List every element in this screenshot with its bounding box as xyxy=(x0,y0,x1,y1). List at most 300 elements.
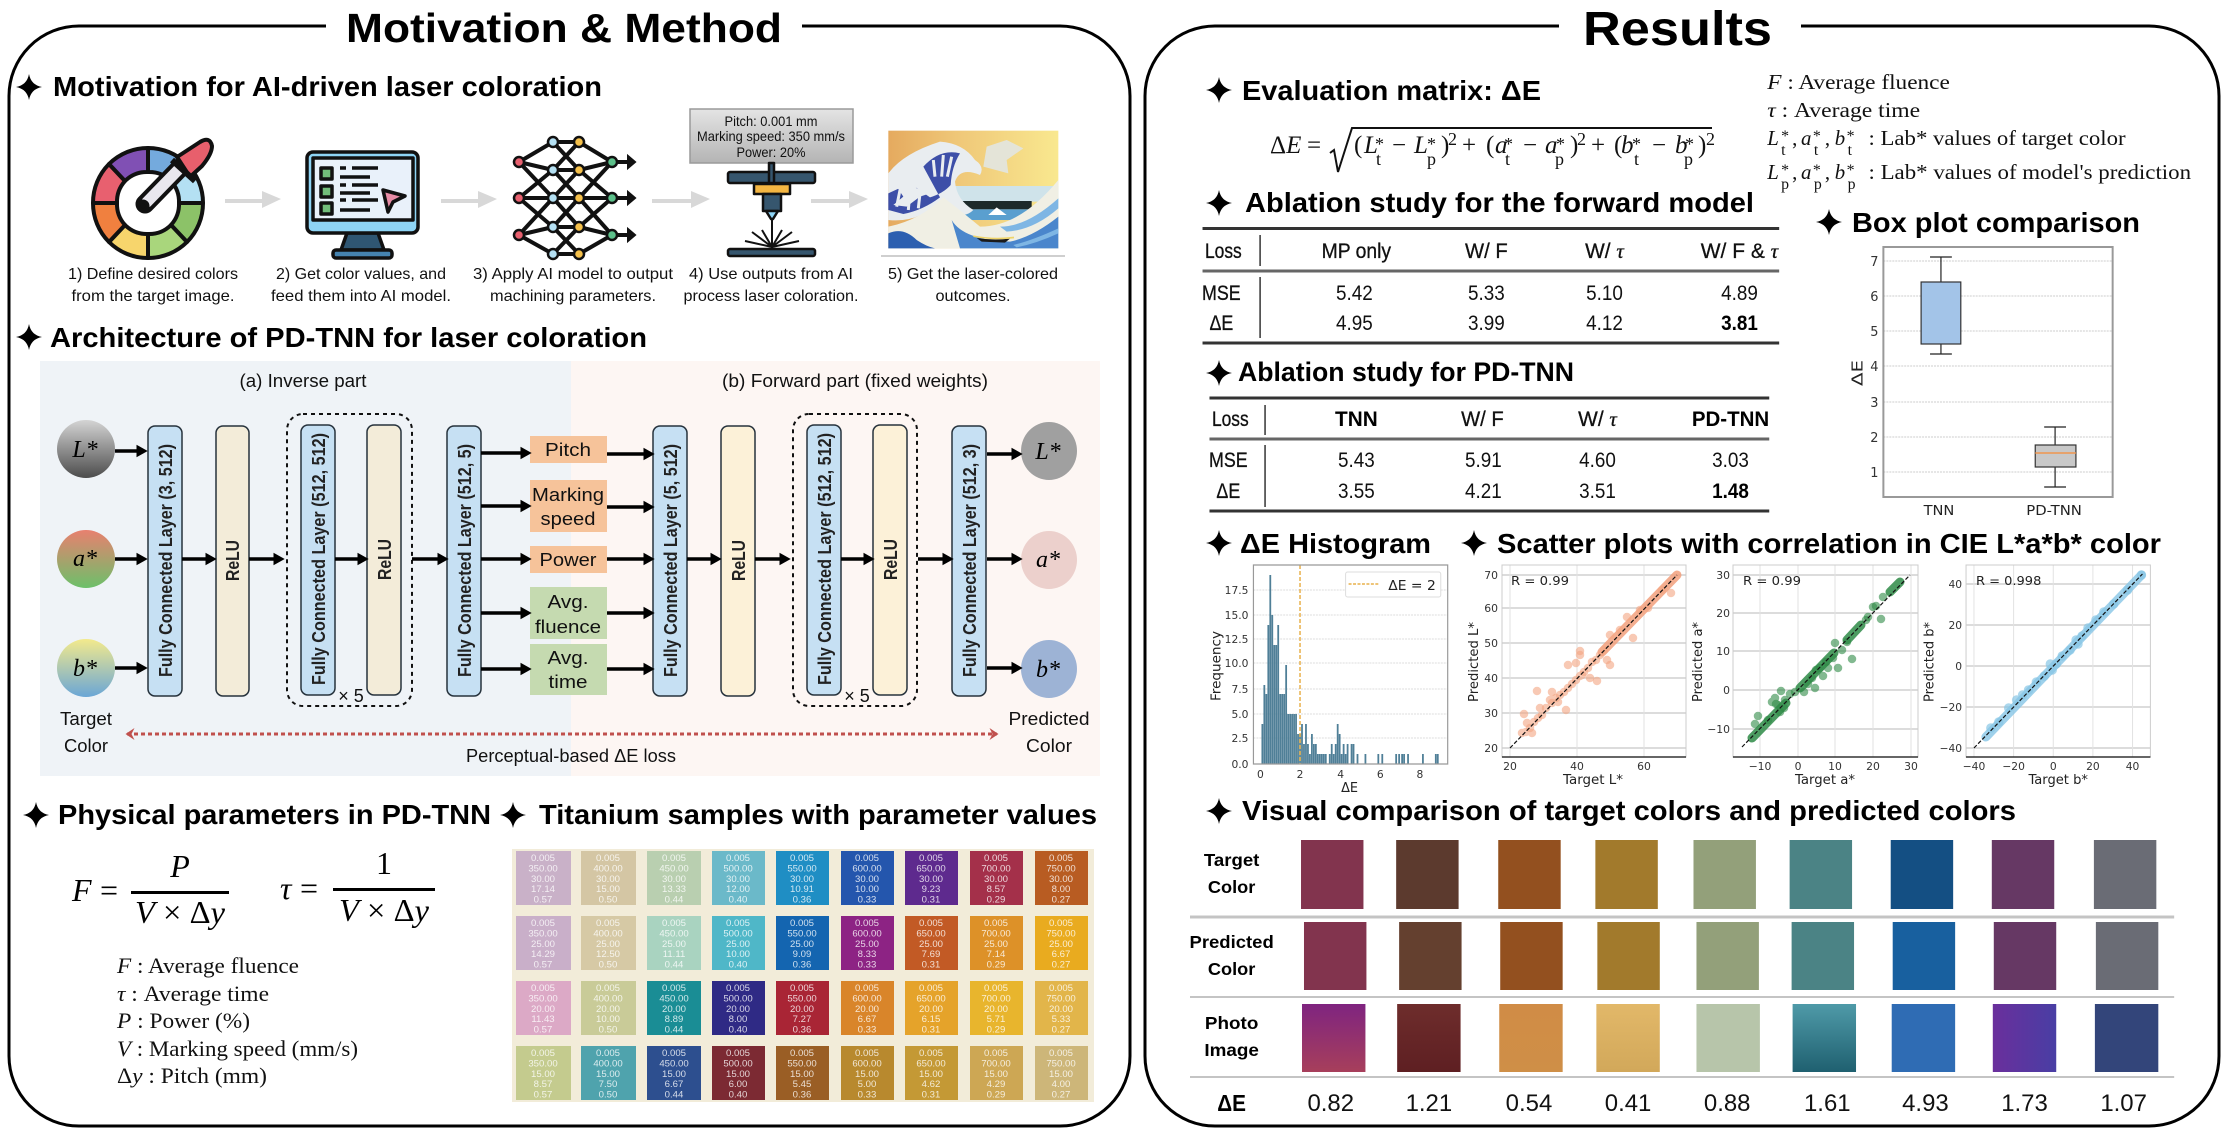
chart: delta E histogram xyxy=(1210,565,1448,796)
image: titanium sample grid: 7.50 xyxy=(599,1079,617,1090)
image: titanium sample grid: 7.27 xyxy=(793,1014,811,1025)
layer: fully connected 512,5: Fully Connected Layer (512, 5) xyxy=(455,444,475,677)
repeated block x5, forward xyxy=(793,414,917,706)
image: titanium sample grid: 9.09 xyxy=(793,949,811,960)
image: titanium sample grid: 0.29 xyxy=(987,1090,1005,1101)
image: titanium sample grid: 0.36 xyxy=(793,960,811,971)
chart: scatter a: 30 xyxy=(1904,760,1918,773)
image: titanium sample grid: 15.00 xyxy=(726,1069,750,1080)
chart: scatter a: −10 xyxy=(1707,723,1730,736)
image: titanium sample grid: 0.27 xyxy=(1052,895,1070,906)
image: titanium sample grid: 0.57 xyxy=(534,960,552,971)
icon: neural network xyxy=(514,137,635,259)
image: titanium sample grid: 0.005 xyxy=(855,983,879,994)
formula: delta E: p xyxy=(1427,149,1436,169)
image: titanium sample grid: 500.00 xyxy=(723,863,753,874)
image: titanium sample grid: 0.005 xyxy=(919,983,943,994)
image: titanium sample grid: 0.005 xyxy=(662,983,686,994)
image: titanium sample grid: 6.67 xyxy=(665,1079,683,1090)
image: titanium sample grid: 30.00 xyxy=(919,874,943,885)
image: titanium sample grid: 0.005 xyxy=(662,1048,686,1059)
formula: delta E: * xyxy=(1632,134,1641,154)
image: titanium sample grid: 600.00 xyxy=(852,863,882,874)
image: titanium sample grid: 750.00 xyxy=(1046,993,1076,1004)
image: titanium sample grid: 25.00 xyxy=(790,939,814,950)
chart: scatter a: 30 xyxy=(1716,569,1730,582)
formula: average time: τ xyxy=(280,870,293,906)
chart: delta E histogram: 6 xyxy=(1377,768,1384,781)
table: PD-TNN ablation: 5.43 xyxy=(1338,449,1375,472)
image: titanium sample grid: 0.33 xyxy=(858,1090,876,1101)
table: forward model ablation: Loss xyxy=(1205,240,1242,263)
image: titanium sample grid: 350.00 xyxy=(528,1058,558,1069)
heading: motivation for AI-driven laser coloration: Motivation for AI-driven laser coloration xyxy=(53,71,602,102)
image: titanium sample grid: 30.00 xyxy=(662,874,686,885)
chart: scatter L: R = 0.99 xyxy=(1511,573,1569,588)
legend: delta E symbols: L xyxy=(1766,160,1779,184)
chart: scatter a: 20 xyxy=(1866,760,1880,773)
formula: average time: V × Δy xyxy=(339,892,430,928)
formula: delta E: ( xyxy=(1354,132,1362,159)
chart: scatter a: 20 xyxy=(1716,607,1730,620)
image: titanium sample grid: 0.50 xyxy=(599,1025,617,1036)
image: titanium sample grid: 0.005 xyxy=(790,853,814,864)
image: titanium sample grid: 0.005 xyxy=(726,1048,750,1059)
chart: delta E histogram: 4 xyxy=(1337,768,1344,781)
image: titanium sample grid: 750.00 xyxy=(1046,928,1076,939)
image: titanium sample grid: 0.005 xyxy=(531,853,555,864)
caption: step 4: 4) Use outputs from AI xyxy=(689,266,853,283)
image: titanium sample grid: 0.36 xyxy=(793,895,811,906)
legend: delta E symbols: p xyxy=(1848,176,1856,193)
legend: physical parameter symbols: P : Power (%) xyxy=(116,1008,250,1033)
chart: scatter a: 0 xyxy=(1795,760,1802,773)
table: PD-TNN ablation: 3.55 xyxy=(1338,480,1375,503)
table: PD-TNN ablation: PD-TNN xyxy=(1692,408,1769,431)
row: delta E values: ΔE xyxy=(1217,1090,1246,1116)
heading: box plot comparison: Box plot comparison xyxy=(1852,207,2140,238)
image: titanium sample grid: 450.00 xyxy=(659,1058,689,1069)
formula: average fluence: = xyxy=(100,872,118,908)
table: PD-TNN ablation: W/ τ xyxy=(1578,407,1618,431)
heading: ablation study forward model: Ablation study for the forward model xyxy=(1245,187,1754,218)
table: forward model ablation: MSE xyxy=(1202,282,1241,305)
formula: delta E: 2 xyxy=(1577,129,1586,149)
image: titanium sample grid: 0.36 xyxy=(793,1090,811,1101)
row: delta E values: 0.41 xyxy=(1605,1090,1651,1117)
image: titanium sample grid: 0.44 xyxy=(665,960,684,971)
parameter: pitch xyxy=(530,436,607,463)
image: titanium sample grid: 15.00 xyxy=(596,1069,620,1080)
image: titanium sample grid: 0.40 xyxy=(729,960,747,971)
image: titanium sample grid: 400.00 xyxy=(593,863,623,874)
formula: average time: = xyxy=(300,870,318,906)
image: titanium sample grid: 15.00 xyxy=(984,1069,1008,1080)
image: titanium sample grid: 650.00 xyxy=(916,928,946,939)
image: titanium sample grid: 25.00 xyxy=(726,939,750,950)
heading: ablation study PD-TNN: Ablation study for PD-TNN xyxy=(1238,357,1574,387)
chart: scatter L: 20 xyxy=(1484,742,1498,755)
image: titanium sample grid: 700.00 xyxy=(981,993,1011,1004)
title: results: Results xyxy=(1583,3,1772,56)
image: titanium sample grid: 600.00 xyxy=(852,928,882,939)
image: titanium sample grid: 8.00 xyxy=(729,1014,747,1025)
row: predicted color: Color xyxy=(1208,959,1255,979)
image: titanium sample grid: 20.00 xyxy=(790,1004,814,1015)
chart: scatter b: 0 xyxy=(1955,660,1962,673)
chart: box plot: 3 xyxy=(1870,396,1878,411)
image: titanium sample grid: 0.31 xyxy=(922,895,940,906)
image: titanium sample grid: 15.00 xyxy=(919,1069,943,1080)
row: delta E values xyxy=(1217,1090,2147,1117)
legend: delta E symbols: a xyxy=(1801,126,1811,150)
image: titanium sample grid: 0.005 xyxy=(790,983,814,994)
image: titanium sample grid: 30.00 xyxy=(1049,874,1073,885)
row: target color: Color xyxy=(1208,877,1255,897)
parameter: average fluence: fluence xyxy=(535,617,601,637)
heading: evaluation matrix: Evaluation matrix: ΔE xyxy=(1242,75,1541,106)
chart: scatter L: 50 xyxy=(1484,637,1498,650)
table: PD-TNN ablation: MSE xyxy=(1209,449,1248,472)
table: forward model ablation: 5.33 xyxy=(1468,282,1505,305)
callout: machining parameter output: Marking speed: 350 mm/s xyxy=(697,128,845,144)
repeated block x5, forward: × 5 xyxy=(844,686,870,706)
formula: delta E: L xyxy=(1413,132,1428,159)
legend: delta E symbols: * xyxy=(1813,162,1821,179)
caption: step 5 xyxy=(888,266,1058,305)
parameter: average time: Avg. xyxy=(548,648,588,668)
image: titanium sample grid: 20.00 xyxy=(596,1004,620,1015)
chart: scatter L: 60 xyxy=(1484,602,1498,615)
image: titanium sample grid: 15.00 xyxy=(855,1069,879,1080)
chart: scatter L: 20 xyxy=(1503,760,1517,773)
image: titanium sample grid: 650.00 xyxy=(916,993,946,1004)
formula: average time xyxy=(280,845,435,928)
image: titanium sample grid: 0.005 xyxy=(726,918,750,929)
image: titanium sample grid: 7.14 xyxy=(987,949,1006,960)
image: titanium sample grid: 20.00 xyxy=(855,1004,879,1015)
image: titanium sample grid: 5.33 xyxy=(1052,1014,1070,1025)
image: titanium sample grid: 6.67 xyxy=(858,1014,876,1025)
image: titanium sample grid: 30.00 xyxy=(726,874,750,885)
chart: box plot: TNN xyxy=(1922,504,1954,519)
layer: fully connected 5,512: Fully Connected Layer (5, 512) xyxy=(661,444,681,677)
legend: physical parameter symbols: F : Average fluence xyxy=(116,953,299,978)
formula: delta E: * xyxy=(1504,134,1513,154)
formula: average fluence: F xyxy=(71,872,92,908)
parameter: marking speed: Marking xyxy=(532,485,604,505)
heading: scatter plots: Scatter plots with correlation in CIE L*a*b* color xyxy=(1497,528,2161,559)
image: titanium sample grid: 25.00 xyxy=(531,939,555,950)
image: titanium sample grid: 600.00 xyxy=(852,993,882,1004)
image: titanium sample grid: 750.00 xyxy=(1046,863,1076,874)
icon: laser head xyxy=(728,163,815,256)
row: target color: Target xyxy=(1204,850,1259,870)
chart: delta E histogram: 17.5 xyxy=(1225,584,1248,597)
image: titanium sample grid: 4.62 xyxy=(922,1079,940,1090)
chart: box plot: 2 xyxy=(1870,431,1878,446)
formula: delta E: b xyxy=(1675,132,1688,159)
formula: average time: 1 xyxy=(376,845,392,881)
image: titanium sample grid: 700.00 xyxy=(981,863,1011,874)
arrow: step 3 to 4 xyxy=(652,191,710,208)
table: PD-TNN ablation: 1.48 xyxy=(1712,480,1749,503)
row: delta E values: 1.21 xyxy=(1406,1090,1452,1117)
image: titanium sample grid: 0.005 xyxy=(919,918,943,929)
chart: delta E histogram: Frequency xyxy=(1210,631,1225,701)
chart: box plot: ΔE xyxy=(1849,360,1867,386)
image: titanium sample grid: 6.15 xyxy=(922,1014,940,1025)
caption: step 3: machining parameters. xyxy=(490,288,656,305)
chart: scatter b: −40 xyxy=(1939,742,1962,755)
formula: average fluence: V × Δy xyxy=(135,894,226,930)
table: PD-TNN ablation: W/ F xyxy=(1461,408,1504,431)
panel: forward part xyxy=(571,361,1100,776)
formula: delta E: ( xyxy=(1486,132,1494,159)
row: delta E values: 4.93 xyxy=(1902,1090,1949,1117)
chart: scatter L: 40 xyxy=(1570,760,1584,773)
chart: box plot: 5 xyxy=(1870,325,1878,340)
arrows: network data flow xyxy=(115,451,1015,669)
image: titanium sample grid: 350.00 xyxy=(528,928,558,939)
image: titanium sample grid: 12.00 xyxy=(726,884,750,895)
parameter: marking speed: speed xyxy=(540,509,596,529)
image: titanium sample grid: 20.00 xyxy=(531,1004,555,1015)
image: titanium sample grid: 0.005 xyxy=(662,918,686,929)
formula: delta E: − xyxy=(1392,132,1406,159)
image: titanium sample grid: 0.29 xyxy=(987,960,1005,971)
row: photo image: Photo xyxy=(1205,1013,1258,1033)
image: titanium sample grid: 0.57 xyxy=(534,1025,552,1036)
heading: visual comparison: Visual comparison of target colors and predicted colors xyxy=(1242,795,2016,826)
formula: delta E: ) xyxy=(1570,132,1578,159)
table: forward model ablation: W/ F xyxy=(1465,240,1508,263)
target color inputs: a* xyxy=(73,546,97,572)
image: titanium sample grid: 350.00 xyxy=(528,863,558,874)
image: titanium sample grid: 0.40 xyxy=(729,1025,747,1036)
image: titanium sample grid: 0.57 xyxy=(534,1090,552,1101)
image: titanium sample grid: 450.00 xyxy=(659,993,689,1004)
icon: computer monitor xyxy=(307,152,418,258)
legend: delta E symbols: F : Average fluence xyxy=(1766,70,1950,94)
image: titanium sample grid: 10.00 xyxy=(596,1014,620,1025)
image: titanium sample grid: 0.50 xyxy=(599,895,617,906)
image: titanium sample grid: 0.005 xyxy=(855,1048,879,1059)
image: titanium sample grid: 14.29 xyxy=(531,949,555,960)
layer: ReLU 3 xyxy=(721,426,755,696)
parameter: pitch: Pitch xyxy=(545,440,591,460)
caption: step 1 xyxy=(68,266,238,305)
label: target color: Target xyxy=(60,709,112,729)
image: titanium sample grid: 0.005 xyxy=(662,853,686,864)
repeated block x5, inverse: ReLU xyxy=(375,539,395,580)
formula: delta E: a xyxy=(1495,132,1508,159)
formula: delta E: t xyxy=(1505,149,1510,169)
row: predicted color xyxy=(1190,922,2158,990)
image: titanium sample grid: 5.71 xyxy=(987,1014,1005,1025)
chart: scatter a: 10 xyxy=(1716,645,1730,658)
formula: delta E: ) xyxy=(1698,132,1706,159)
chart: delta E histogram: 15.0 xyxy=(1225,609,1249,622)
panel: forward part: (b) Forward part (fixed weights) xyxy=(722,371,988,391)
chart: delta E histogram: 2.5 xyxy=(1231,732,1248,745)
formula: delta E: ( xyxy=(1614,132,1622,159)
legend: physical parameter symbols: Δy : Pitch (mm) xyxy=(117,1063,267,1088)
image: titanium sample grid: 0.005 xyxy=(531,983,555,994)
heading: architecture of PD-TNN: Architecture of PD-TNN for laser coloration xyxy=(50,322,647,353)
image: titanium sample grid: 0.31 xyxy=(922,1090,940,1101)
image: laser-colored great wave xyxy=(881,123,1065,257)
predicted color outputs: a* xyxy=(1036,547,1060,573)
image: titanium sample grid: 400.00 xyxy=(593,993,623,1004)
chart: delta E histogram: ΔE = 2 xyxy=(1388,579,1436,594)
image: titanium sample grid: 20.00 xyxy=(726,1004,750,1015)
image: titanium sample grid: 10.00 xyxy=(726,949,750,960)
image: titanium sample grid: 15.00 xyxy=(596,884,620,895)
image: titanium sample grid: 0.005 xyxy=(919,853,943,864)
chart: delta E histogram: 12.5 xyxy=(1225,633,1248,646)
row: delta E values: 1.73 xyxy=(2001,1090,2048,1117)
layer: fully connected 512,3 xyxy=(952,426,986,696)
legend: physical parameter symbols: V : Marking speed (mm/s) xyxy=(117,1036,358,1061)
image: titanium sample grid: 17.14 xyxy=(531,884,556,895)
chart: box plot: 6 xyxy=(1870,290,1878,305)
parameter: average fluence: Avg. xyxy=(548,592,588,612)
table: forward model ablation: W/ F & τ xyxy=(1701,239,1780,263)
image: titanium sample grid: 30.00 xyxy=(790,874,814,885)
chart: scatter a: Target a* xyxy=(1794,773,1855,788)
image: titanium sample grid: 15.00 xyxy=(662,1069,686,1080)
image: titanium sample grid: 0.005 xyxy=(531,1048,555,1059)
label: predicted color: Color xyxy=(1026,736,1072,756)
caption: step 1: 1) Define desired colors xyxy=(68,266,238,283)
chart: scatter b xyxy=(1922,565,2150,788)
chart: delta E histogram: 0 xyxy=(1257,768,1264,781)
chart: delta E histogram: 0.0 xyxy=(1231,758,1249,771)
image: titanium sample grid: 0.005 xyxy=(1049,983,1073,994)
formula: delta E xyxy=(1270,128,1715,172)
legend: physical parameter symbols: τ : Average time xyxy=(117,981,269,1006)
label: predicted color xyxy=(1008,709,1090,756)
table: PD-TNN ablation: 3.51 xyxy=(1579,480,1616,503)
legend: delta E symbols: * xyxy=(1813,128,1821,145)
image: titanium sample grid: 5.45 xyxy=(793,1079,811,1090)
image: titanium sample grid: 0.005 xyxy=(790,918,814,929)
row: delta E values: 0.54 xyxy=(1506,1090,1552,1117)
chart: scatter b: 0 xyxy=(2050,760,2057,773)
target color inputs xyxy=(57,420,115,697)
row: delta E values: 1.07 xyxy=(2100,1090,2147,1117)
chart: scatter L: Predicted L* xyxy=(1467,621,1482,702)
legend: delta E symbols: τ : Average time xyxy=(1767,98,1920,122)
repeated block x5, forward: Fully Connected Layer (512, 512) xyxy=(815,433,835,685)
image: titanium sample grid: 700.00 xyxy=(981,1058,1011,1069)
table: PD-TNN ablation: ΔE xyxy=(1216,480,1240,503)
legend: delta E symbols: * xyxy=(1781,128,1789,145)
layer: fully connected 512,5 xyxy=(447,426,481,696)
image: titanium sample grid: 20.00 xyxy=(919,1004,943,1015)
chart: scatter L: 40 xyxy=(1484,672,1498,685)
table: forward model ablation: ΔE xyxy=(1209,312,1233,335)
table: PD-TNN ablation: 4.21 xyxy=(1465,480,1502,503)
table: PD-TNN ablation: Loss xyxy=(1212,408,1249,431)
chart: scatter a: Predicted a* xyxy=(1691,621,1706,702)
callout: machining parameter output: Power: 20% xyxy=(736,144,806,160)
legend: delta E symbols: * xyxy=(1781,162,1789,179)
image: titanium sample grid: 550.00 xyxy=(787,863,817,874)
image: titanium sample grid: 0.005 xyxy=(984,1048,1008,1059)
image: titanium sample grid: 12.50 xyxy=(596,949,620,960)
image: titanium sample grid: 0.005 xyxy=(855,918,879,929)
legend: delta E symbols: , xyxy=(1825,160,1830,184)
image: titanium sample grid: 650.00 xyxy=(916,1058,946,1069)
caption: step 3 xyxy=(473,266,674,305)
image: titanium sample grid: 0.29 xyxy=(987,895,1005,906)
legend: delta E symbols: a xyxy=(1801,160,1811,184)
target color inputs: b* xyxy=(73,656,97,682)
image: titanium sample grid: 0.40 xyxy=(729,895,747,906)
image: titanium sample grid: 0.005 xyxy=(596,1048,620,1059)
chart: scatter L xyxy=(1467,565,1686,788)
image: titanium sample grid: 400.00 xyxy=(593,928,623,939)
legend: delta E symbols: t xyxy=(1848,142,1853,159)
layer: ReLU 1 xyxy=(216,426,249,696)
parameter: power xyxy=(530,546,607,573)
table: forward model ablation: 5.42 xyxy=(1336,282,1373,305)
image: titanium sample grid: 0.005 xyxy=(984,983,1008,994)
image: titanium sample grid: 0.44 xyxy=(665,1025,684,1036)
chart: box plot xyxy=(1849,247,2113,519)
image: titanium sample grid: 7.69 xyxy=(922,949,940,960)
table: color comparison xyxy=(1190,840,2174,1117)
image: titanium sample grid: 9.23 xyxy=(922,884,940,895)
chart: scatter a: −10 xyxy=(1749,760,1772,773)
table: forward model ablation: 4.12 xyxy=(1586,312,1623,335)
image: titanium sample grid: 0.005 xyxy=(1049,853,1073,864)
label: target color xyxy=(60,709,112,756)
chart: scatter a: R = 0.99 xyxy=(1743,573,1801,588)
image: titanium sample grid: 0.005 xyxy=(1049,918,1073,929)
chart: scatter b: R = 0.998 xyxy=(1976,573,2041,588)
legend: delta E symbols: b xyxy=(1835,160,1845,184)
image: titanium sample grid: 500.00 xyxy=(723,928,753,939)
chart: scatter b: −20 xyxy=(2002,760,2025,773)
image: titanium sample grid: 0.005 xyxy=(726,853,750,864)
table: forward model ablation: 3.99 xyxy=(1468,312,1505,335)
image: titanium sample grid xyxy=(512,849,1094,1102)
target color inputs: L* xyxy=(71,437,98,463)
formula: average fluence xyxy=(71,848,229,930)
row: delta E values: 0.82 xyxy=(1307,1090,1354,1117)
repeated block x5, forward: ReLU xyxy=(881,539,901,580)
chart: scatter L: 30 xyxy=(1484,707,1498,720)
repeated block x5, inverse: × 5 xyxy=(338,686,364,706)
chart: scatter b: 20 xyxy=(2086,760,2100,773)
image: titanium sample grid: 550.00 xyxy=(787,1058,817,1069)
image: titanium sample grid: 8.89 xyxy=(665,1014,683,1025)
table: forward model ablation: 4.89 xyxy=(1721,282,1758,305)
chart: scatter b: 20 xyxy=(1948,619,1962,632)
chart: scatter L: 60 xyxy=(1637,760,1651,773)
image: titanium sample grid: 500.00 xyxy=(723,993,753,1004)
panel: inverse part xyxy=(40,361,571,776)
caption: step 4: process laser coloration. xyxy=(684,288,858,305)
legend: delta E symbols: * xyxy=(1847,128,1855,145)
image: titanium sample grid: 0.27 xyxy=(1052,1090,1070,1101)
image: titanium sample grid: 500.00 xyxy=(723,1058,753,1069)
row: delta E values: 1.61 xyxy=(1804,1090,1851,1117)
chart: scatter b: −20 xyxy=(1939,701,1962,714)
